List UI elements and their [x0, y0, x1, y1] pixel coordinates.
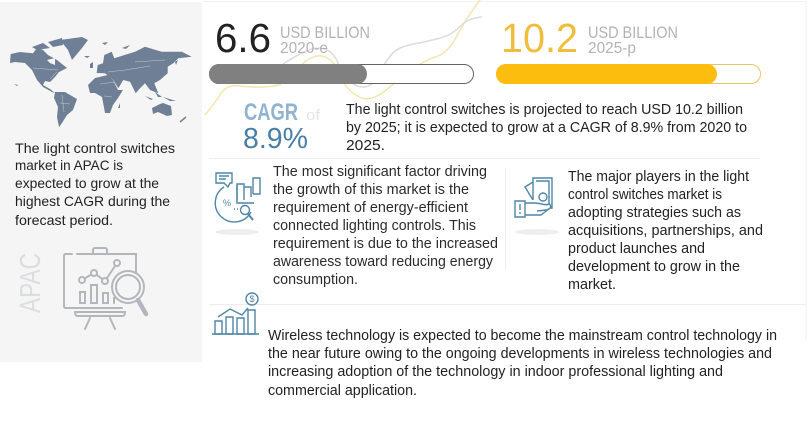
description: APAC text: expected to grow at the — [15, 175, 159, 191]
text: major players: market. — [568, 276, 616, 293]
progress bar: 2020 — [209, 64, 474, 84]
panel: left APAC — [0, 2, 202, 362]
CAGR callout: of — [306, 107, 321, 124]
description: APAC text: market in APAC is — [15, 157, 123, 173]
stat: 10.2 USD billion 2025: 10.2 — [501, 15, 578, 61]
text: wireless technology: the near future owing to the ongoing developments in wireless technologies and — [268, 345, 772, 362]
text: growth driver — [273, 163, 498, 288]
text: growth driver: connected lighting controls. This — [273, 217, 476, 234]
stat: 6.6 USD billion 2020: USD BILLION — [280, 23, 370, 42]
icon: hand holding money — [515, 178, 559, 235]
CAGR callout: CAGR — [244, 99, 298, 126]
text: major players: development to grow in the — [568, 258, 740, 275]
text: wireless technology — [268, 327, 777, 399]
text: market projection: The light control switches is projected to reach USD 10.2 billion — [346, 101, 743, 118]
progress bar: 2025 — [496, 64, 760, 84]
text: wireless technology: Wireless technology is expected to become the mainstream control technology in — [268, 327, 777, 344]
text: growth driver: awareness toward reducing energy — [273, 253, 493, 270]
description: APAC text: The light control switches — [15, 140, 175, 156]
text: major players: The major players in the light — [568, 168, 750, 185]
description: APAC text: forecast period. — [15, 212, 113, 228]
world map — [10, 37, 192, 127]
text: growth driver: The most significant factor driving — [273, 163, 487, 180]
background decorative curves — [205, 0, 482, 115]
icon: presentation board with magnifier — [64, 248, 146, 329]
APAC vertical label: APAC — [15, 253, 47, 313]
text: growth driver: requirement is due to the increased — [273, 235, 498, 252]
stat: 6.6 USD billion 2020: 2020-e — [280, 40, 328, 57]
icon: pie chart with magnifier — [215, 173, 260, 235]
text: market projection — [346, 101, 747, 154]
text: market projection: 2025. — [346, 137, 385, 154]
text: major players — [568, 168, 763, 293]
stat: 10.2 USD billion 2025: 2025-p — [588, 40, 636, 57]
text: market projection: by 2025; it is expected to grow at a CAGR of 8.9% from 2020 to — [346, 119, 747, 136]
stat: 10.2 USD billion 2025 — [496, 15, 760, 84]
icon: bar chart with dollar coin — [212, 293, 259, 334]
stat: 10.2 USD billion 2025: USD BILLION — [588, 23, 678, 42]
text: major players: control switches market is — [568, 186, 722, 203]
text: growth driver: requirement of energy-efficient — [273, 199, 469, 216]
text: major players: adopting strategies such as — [568, 204, 741, 221]
text: major players: acquisitions, partnerships, and — [568, 222, 763, 239]
text: wireless technology: commercial application. — [268, 382, 417, 399]
description: APAC text: highest CAGR during the — [15, 193, 170, 209]
stat: 6.6 USD billion 2020 — [209, 15, 474, 84]
description: APAC text — [15, 140, 175, 228]
text: growth driver: consumption. — [273, 271, 358, 288]
CAGR callout — [243, 99, 321, 155]
text: major players: product launches and — [568, 240, 705, 257]
icon: bar chart with dollar coin: $ — [250, 294, 255, 304]
stat: 6.6 USD billion 2020: 6.6 — [215, 15, 271, 61]
CAGR callout: 8.9% — [243, 123, 308, 155]
icon: pie chart with magnifier: % — [223, 198, 231, 208]
text: growth driver: the growth of this market is the — [273, 181, 469, 198]
text: wireless technology: increasing adoption of the technology in indoor professional lighting and — [268, 363, 723, 380]
